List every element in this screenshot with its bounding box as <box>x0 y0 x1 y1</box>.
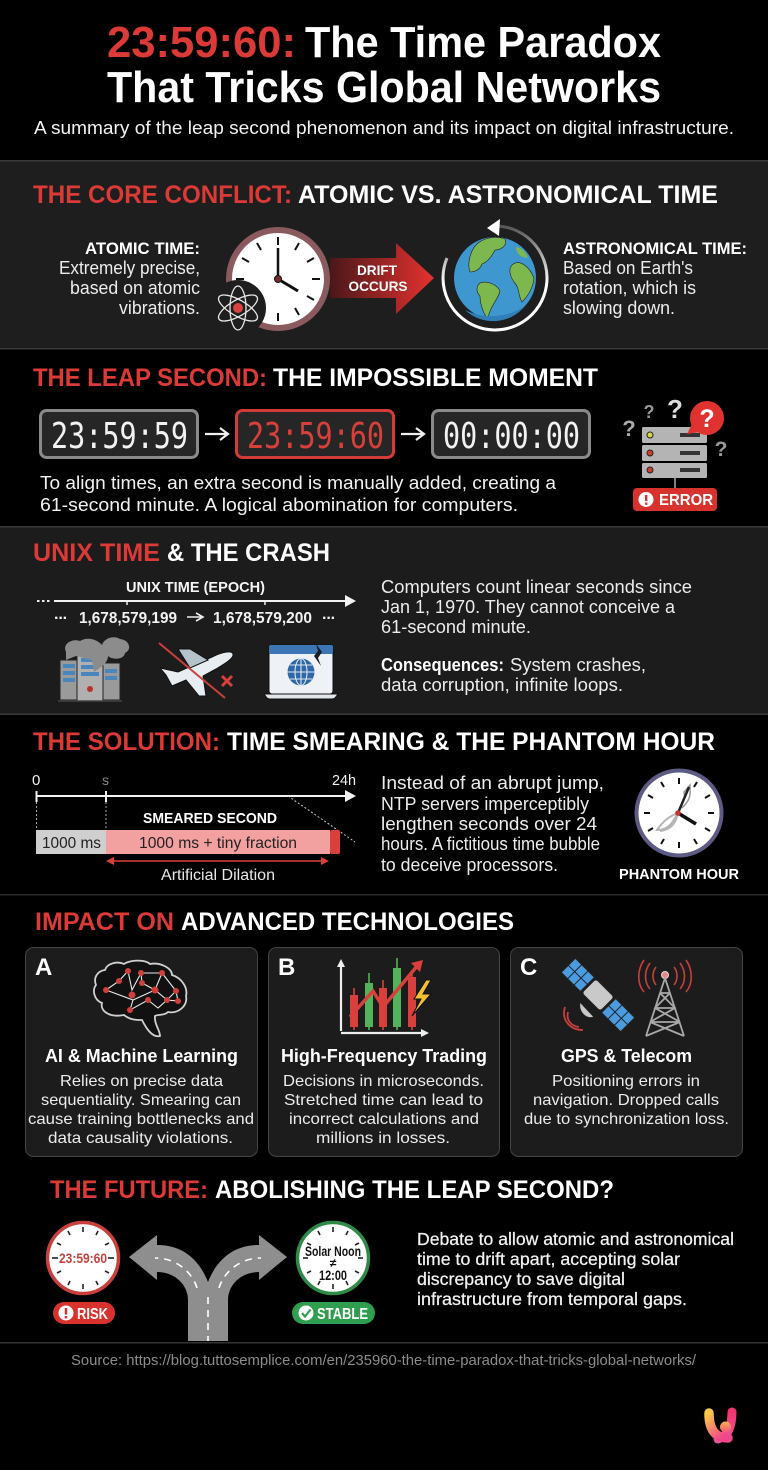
digital display: 23:59:60: 23:59:60 <box>247 416 384 457</box>
text: astronomical time: rotation, which is <box>563 278 696 298</box>
text: astronomical time <box>563 239 747 318</box>
icon: confused server: ? <box>644 402 654 422</box>
text: unix explanation <box>381 577 692 637</box>
badge: stable: STABLE <box>317 1306 368 1323</box>
card: high frequency trading <box>268 948 500 1156</box>
text: consequences <box>381 655 646 695</box>
heading: core conflict: THE CORE CONFLICT: <box>33 181 292 209</box>
panel: leap second <box>33 364 727 515</box>
chart: smearing timeline <box>32 772 356 884</box>
icon: stable clock: Solar Noon <box>305 1244 361 1259</box>
icon: radio tower <box>639 960 691 1036</box>
footer <box>0 1342 768 1439</box>
text: atomic time <box>59 239 200 318</box>
digital display: 23:59:59: 23:59:59 <box>51 416 188 457</box>
heading: leap second: THE LEAP SECOND: <box>33 364 267 392</box>
chart: smearing timeline: 24h <box>332 772 356 789</box>
card text: navigation. Dropped calls <box>533 1092 719 1109</box>
text: leap explanation: To align times, an extra second is manually added, creating a <box>40 472 557 493</box>
chart: smearing timeline: Artificial Dilation <box>161 867 275 884</box>
panel: unix time <box>0 526 768 715</box>
card text: due to synchronization loss. <box>524 1111 729 1128</box>
arrow: forked road <box>129 1235 287 1341</box>
text: future debate: time to drift apart, accepting solar <box>417 1249 680 1269</box>
heading: future: ABOLISHING THE LEAP SECOND? <box>215 1176 614 1204</box>
icon: risk clock: 23:59:60 <box>59 1250 107 1266</box>
icon: rotating earth <box>443 219 547 330</box>
panel: solution <box>32 728 739 884</box>
timeline: unix epoch: 1,678,579,199 <box>79 610 177 627</box>
title <box>107 18 661 112</box>
text: unix explanation: 61-second minute. <box>381 617 531 637</box>
text: future debate <box>417 1229 734 1309</box>
timeline: unix epoch: UNIX TIME (EPOCH) <box>126 579 265 596</box>
arrow: drift occurs <box>330 243 434 314</box>
icon: broken website laptop <box>264 644 338 699</box>
card text <box>28 1073 254 1147</box>
icon: confused server: ? <box>622 416 636 441</box>
text: atomic time: vibrations. <box>119 298 200 318</box>
heading: unix time: & THE CRASH <box>167 539 330 567</box>
icon: confused server <box>622 394 727 511</box>
card title: GPS & Telecom <box>561 1046 692 1066</box>
card text: incorrect calculations and <box>289 1111 479 1128</box>
letter A: A <box>35 954 52 981</box>
text: smearing explanation: to deceive processors. <box>381 855 558 875</box>
heading: future: THE FUTURE: <box>50 1176 208 1204</box>
text: atomic time: ATOMIC TIME: <box>85 239 200 258</box>
icon: phantom hour clock <box>636 770 722 856</box>
text: astronomical time: slowing down. <box>563 298 675 318</box>
text: smearing explanation: Instead of an abrupt jump, <box>381 773 604 793</box>
subtitle: A summary of the leap second phenomenon and its impact on digital infrastructure. <box>34 118 734 138</box>
heading: unix time: UNIX TIME <box>33 539 160 567</box>
chart: smearing timeline: 1000 ms + tiny fraction <box>139 835 297 852</box>
panel: impact on advanced technologies <box>0 894 768 1156</box>
panel: core conflict <box>0 160 768 350</box>
arrow: drift occurs: OCCURS <box>348 278 408 294</box>
source line: Source: https://blog.tuttosemplice.com/en/235960-the-time-paradox-that-tricks-global-networks/ <box>71 1353 697 1369</box>
heading: solution: THE SOLUTION: <box>33 728 220 756</box>
digital display: 00:00:00: 00:00:00 <box>443 416 580 457</box>
timeline: unix epoch: 1,678,579,200 <box>213 610 312 627</box>
icon: atomic clock <box>210 230 327 336</box>
icon: trading chart <box>337 958 431 1037</box>
card text: Stretched time can lead to <box>284 1092 483 1109</box>
text: astronomical time: ASTRONOMICAL TIME: <box>563 239 747 258</box>
heading: impact <box>35 908 514 936</box>
arrow <box>401 428 424 440</box>
icon: logo <box>709 1412 732 1439</box>
text: future debate: discrepancy to save digital <box>417 1269 625 1289</box>
heading: leap second <box>33 364 598 392</box>
badge: error: ERROR <box>659 492 713 509</box>
timeline: unix epoch <box>37 579 356 627</box>
title: 23:59:60: <box>107 18 296 67</box>
text: future debate: Debate to allow atomic and astronomical <box>417 1229 734 1249</box>
heading: solution: TIME SMEARING & THE PHANTOM HOUR <box>227 728 715 756</box>
text: smearing explanation: hours. A fictitious time bubble <box>381 834 600 854</box>
text: smearing explanation <box>381 773 604 875</box>
arrow: drift occurs: DRIFT <box>357 262 397 278</box>
heading: impact: IMPACT ON <box>35 908 174 936</box>
chart: smearing timeline: SMEARED SECOND <box>143 810 277 827</box>
card title: High-Frequency Trading <box>281 1046 487 1066</box>
card text: cause training bottlenecks and <box>28 1111 254 1128</box>
text: unix explanation: Jan 1, 1970. They cannot conceive a <box>381 597 676 617</box>
letter C: C <box>520 954 537 981</box>
card text <box>524 1073 729 1128</box>
title: The Time Paradox <box>305 18 661 67</box>
text: leap explanation: 61-second minute. A logical abomination for computers. <box>40 494 518 515</box>
text: smearing explanation: NTP servers imperceptibly <box>381 794 589 814</box>
heading: leap second: THE IMPOSSIBLE MOMENT <box>273 364 598 392</box>
card: GPS and telecom <box>510 948 742 1156</box>
badge: risk: RISK <box>77 1306 109 1323</box>
icon: stable clock: ≠ <box>330 1256 337 1270</box>
text: unix explanation: Computers count linear seconds since <box>381 577 692 597</box>
title: That Tricks Global Networks <box>107 63 661 112</box>
icon: confused server: ? <box>667 394 683 424</box>
badge: risk <box>53 1302 115 1324</box>
text: atomic time: Extremely precise, <box>59 258 200 278</box>
heading: impact: ADVANCED TECHNOLOGIES <box>181 908 514 936</box>
heading: future <box>50 1176 614 1204</box>
arrow <box>205 428 228 440</box>
card text: data causality violations. <box>48 1130 233 1147</box>
heading: core conflict: ATOMIC VS. ASTRONOMICAL TIME <box>298 181 718 209</box>
card text: millions in losses. <box>316 1130 450 1147</box>
text: future debate: infrastructure from temporal gaps. <box>417 1289 687 1309</box>
card text: Relies on precise data <box>60 1073 223 1090</box>
heading: unix time <box>33 539 330 567</box>
text: consequences: System crashes, <box>510 655 646 675</box>
text: astronomical time: Based on Earth's <box>563 258 693 278</box>
icon: grounded plane <box>159 643 233 698</box>
card text: Decisions in microseconds. <box>283 1073 484 1090</box>
text: smearing explanation: lengthen seconds over 24 <box>381 814 597 834</box>
icon: neural brain <box>94 961 186 1036</box>
heading: core conflict <box>33 181 718 209</box>
icon: stable clock <box>298 1222 368 1294</box>
card text: Positioning errors in <box>552 1073 700 1090</box>
icon: satellite <box>561 958 635 1032</box>
icon: confused server: ? <box>699 405 715 433</box>
chart: smearing timeline: 0 <box>32 772 40 789</box>
letter B: B <box>278 954 295 981</box>
card: AI and machine learning <box>26 948 258 1156</box>
text: consequences: Consequences: <box>381 655 504 675</box>
label: phantom hour: PHANTOM HOUR <box>619 866 739 883</box>
icon: risk clock <box>48 1222 118 1294</box>
icon: atom <box>215 286 261 330</box>
panel: header <box>34 18 734 138</box>
icon: smoking servers <box>58 637 129 701</box>
text: consequences: data corruption, infinite loops. <box>381 675 623 695</box>
card title: AI & Machine Learning <box>45 1046 238 1066</box>
text: atomic time: based on atomic <box>70 278 200 298</box>
chart: smearing timeline: 1000 ms <box>42 835 101 852</box>
panel: the future <box>48 1176 734 1341</box>
timeline: unix epoch: ··· <box>322 610 336 627</box>
card text <box>283 1073 484 1147</box>
text: leap explanation <box>40 472 557 515</box>
chart: smearing timeline: s <box>102 772 109 788</box>
icon: confused server: ? <box>715 438 727 461</box>
card text: sequentiality. Smearing can <box>41 1092 241 1109</box>
icon: stable clock: 12:00 <box>319 1268 347 1283</box>
timeline: unix epoch: ··· <box>54 610 68 627</box>
badge: stable <box>292 1302 375 1324</box>
